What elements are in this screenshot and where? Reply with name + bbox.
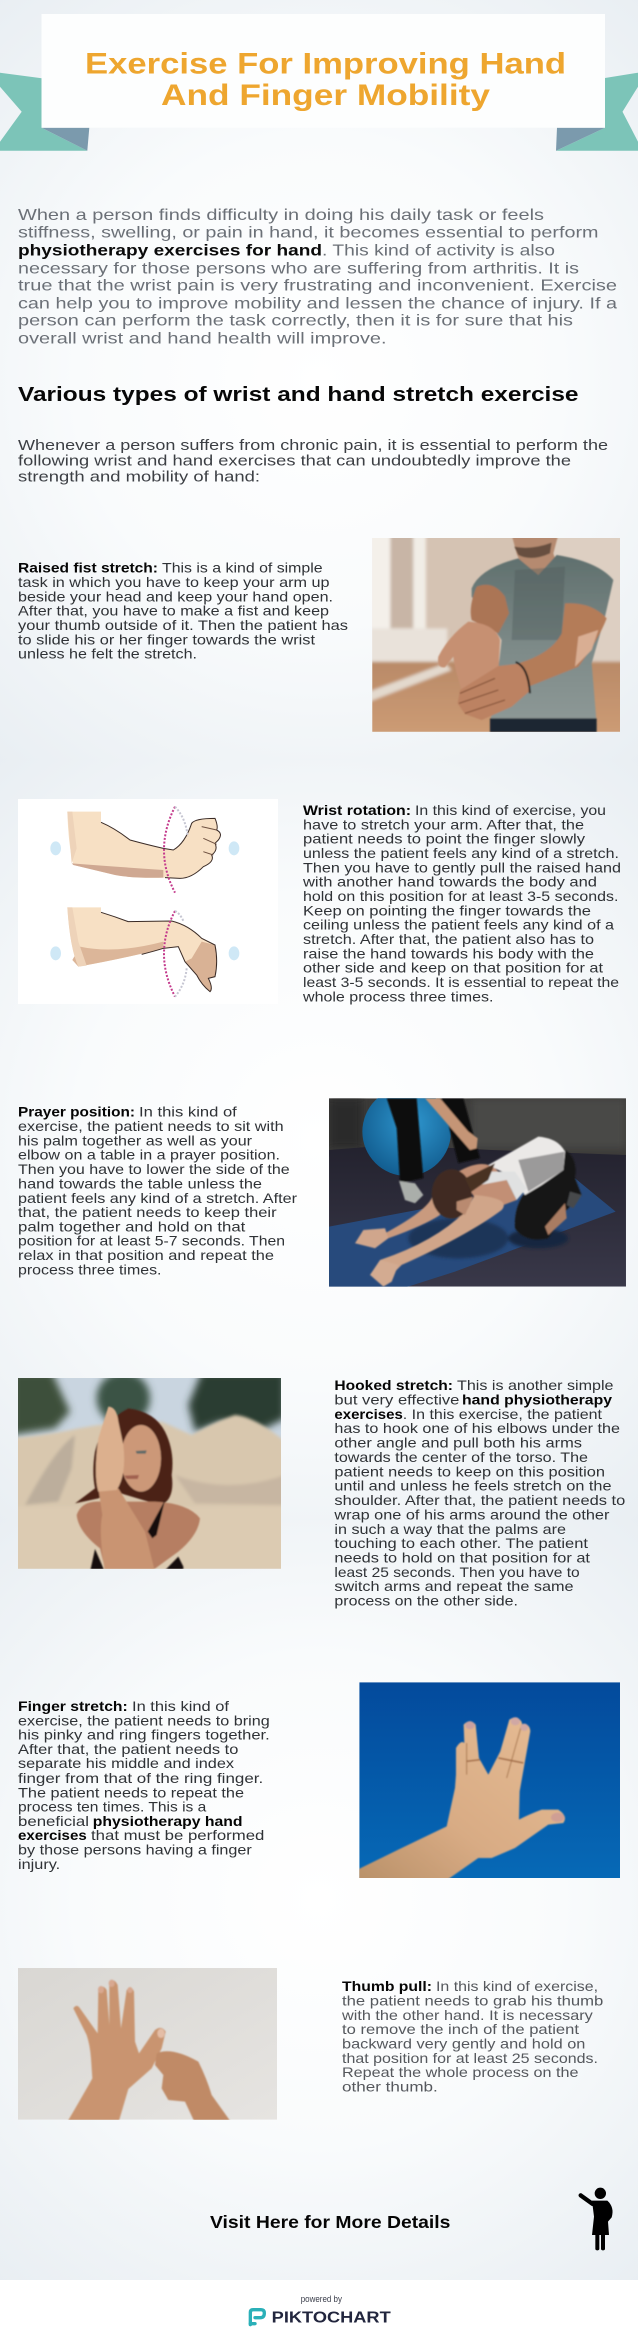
text: prayer position: Then you have to lower the side of the — [18, 1161, 290, 1177]
footer — [0, 2280, 638, 2344]
text: thumb pull: In this kind of exercise, — [436, 1978, 598, 1994]
lead-in paragraph: strength and mobility of hand: — [18, 470, 260, 486]
text: thumb pull: that position for at least 25 seconds. — [342, 2050, 598, 2066]
intro paragraph: physiotherapy exercises for hand — [18, 242, 322, 259]
text: wrist rotation: Wrist rotation: — [303, 802, 411, 818]
text: raised fist stretch — [18, 560, 348, 662]
text: hooked stretch: least 25 seconds. Then you have to — [334, 1564, 580, 1580]
intro paragraph: stiffness, swelling, or pain in hand, it becomes essential to perform — [18, 225, 598, 242]
text: wrist rotation — [302, 802, 621, 1005]
text: wrist rotation: unless the patient feels any kind of a stretch. — [303, 845, 619, 861]
text: prayer position: exercise, the patient needs to sit with — [18, 1118, 284, 1134]
text: hooked stretch: towards the center of the torso. The — [334, 1449, 588, 1465]
intro paragraph: necessary for those persons who are suffering from arthritis. It is — [18, 260, 579, 277]
ribbon right — [556, 73, 638, 151]
text: finger stretch: In this kind of — [132, 1698, 229, 1714]
text: finger stretch: separate his middle and index — [18, 1755, 234, 1771]
photo: man stretching wrist — [372, 538, 620, 732]
arm: hand lowered — [67, 907, 217, 992]
text: raised fist stretch: to slide his or her finger towards the wrist — [18, 631, 315, 647]
text: wrist rotation: least 3-5 seconds. It is essential to repeat the — [303, 974, 619, 990]
arm: fist raised — [67, 812, 220, 878]
intro paragraph: true that the wrist pain is very frustrating and inconvenient. Exercise — [18, 278, 617, 295]
text: raised fist stretch: Raised fist stretch: — [18, 560, 158, 576]
text: hooked stretch: but very effective — [334, 1391, 460, 1407]
intro paragraph: can help you to improve mobility and lessen the chance of injury. If a — [18, 295, 617, 312]
text: hooked stretch: wrap one of his arms around the other — [333, 1506, 610, 1522]
text: wrist rotation: have to stretch your arm. After that, the — [303, 816, 584, 832]
text: finger stretch: exercise, the patient needs to bring — [18, 1712, 270, 1728]
text: prayer position: process three times. — [18, 1261, 162, 1277]
text: finger stretch: that must be performed — [91, 1827, 264, 1843]
text: thumb pull: backward very gently and hold on — [342, 2035, 585, 2051]
footer: PIKTOCHART — [272, 2310, 391, 2327]
intro paragraph: . This kind of activity is also — [322, 242, 555, 259]
text: hooked stretch — [333, 1377, 626, 1608]
text: prayer position: hand towards the table unless the — [18, 1176, 262, 1192]
photo: hand with split fingers on blue sky — [359, 1682, 620, 1878]
text: wrist rotation: Keep on pointing the finger towards the — [303, 902, 591, 918]
title banner: And Finger Mobility — [161, 79, 490, 112]
text: prayer position: that, the patient needs to keep their — [18, 1204, 277, 1220]
text: wrist rotation: whole process three times. — [302, 989, 494, 1005]
text: hooked stretch: other angle and pull both his arms — [334, 1434, 582, 1450]
text: thumb pull: Repeat the whole process on the — [342, 2064, 579, 2080]
text: wrist rotation: ceiling unless the patient feels any kind of a — [303, 917, 614, 933]
footer: powered by — [301, 2294, 342, 2304]
section heading: Various types of wrist and hand stretch exercise — [18, 383, 578, 406]
intro paragraph — [18, 207, 617, 347]
guide dots — [50, 841, 239, 960]
text: finger stretch: finger from that of the ring finger. — [18, 1770, 263, 1786]
text: wrist rotation: with another hand towards the body and — [302, 874, 597, 890]
text: wrist rotation: hold on this position for at least 3-5 seconds. — [303, 888, 618, 904]
lead-in paragraph: following wrist and hand exercises that can undoubtedly improve the — [18, 454, 571, 470]
text: wrist rotation: patient needs to point the finger slowly — [303, 831, 585, 847]
title banner — [42, 14, 605, 128]
text: prayer position: patient feels any kind of a stretch. After — [18, 1190, 297, 1206]
text: thumb pull: other thumb. — [342, 2078, 438, 2094]
text: finger stretch: physiotherapy hand — [93, 1813, 242, 1829]
icon: person pointing — [578, 2188, 612, 2250]
intro paragraph: overall wrist and hand health will improve. — [18, 330, 386, 347]
text: raised fist stretch: unless he felt the stretch. — [18, 646, 197, 662]
text: wrist rotation: other side and keep on that position for at — [303, 960, 603, 976]
text: prayer position: relax in that position and repeat the — [18, 1247, 274, 1263]
text: finger stretch: Finger stretch: — [18, 1698, 128, 1714]
text: wrist rotation: In this kind of exercise, you — [415, 802, 606, 818]
intro paragraph: person can perform the task correctly, then it is for sure that his — [18, 313, 573, 330]
text: prayer position: his palm together as well as your — [18, 1132, 252, 1148]
text: hooked stretch: needs to hold on that position for at — [334, 1550, 590, 1566]
text: thumb pull: the patient needs to grab his thumb — [342, 1992, 604, 2008]
text: hooked stretch: in such a way that the palms are — [334, 1521, 566, 1537]
text: prayer position: elbow on a table in a prayer position. — [18, 1147, 280, 1163]
text: thumb pull — [341, 1978, 604, 2094]
text: raised fist stretch: beside your head and keep your hand open. — [18, 588, 333, 604]
text: prayer position: Prayer position: — [18, 1103, 135, 1119]
text: finger stretch: injury. — [18, 1856, 60, 1872]
text: thumb pull: Thumb pull: — [342, 1978, 432, 1994]
text: hooked stretch: This is another simple — [457, 1377, 614, 1393]
photo: pulling the thumb — [18, 1968, 277, 2120]
text: finger stretch: beneficial — [18, 1813, 89, 1829]
text: hooked stretch: . In this exercise, the patient — [403, 1406, 602, 1422]
text: finger stretch: his pinky and ring fingers together. — [18, 1727, 270, 1743]
call to action: Visit Here for More Details — [210, 2212, 450, 2232]
text: finger stretch: by those persons having a finger — [18, 1842, 252, 1858]
title banner: Exercise For Improving Hand — [85, 47, 566, 80]
text: thumb pull: with the other hand. It is necessary — [341, 2007, 593, 2023]
text: hooked stretch: patient needs to keep on this position — [334, 1463, 605, 1479]
text: hooked stretch: shoulder. After that, the patient needs to — [334, 1492, 626, 1508]
text: finger stretch: The patient needs to repeat the — [18, 1784, 244, 1800]
text: finger stretch — [18, 1698, 270, 1872]
text: hooked stretch: hand physiotherapy — [462, 1391, 612, 1407]
text: thumb pull: to remove the inch of the patient — [342, 2021, 579, 2037]
text: wrist rotation: Then you have to gently pull the raised hand — [303, 859, 621, 875]
rotation rings — [164, 807, 188, 997]
text: hooked stretch: until and unless he feels stretch on the — [334, 1478, 612, 1494]
intro paragraph: When a person finds difficulty in doing his daily task or feels — [18, 207, 544, 224]
icon: piktochart logo — [248, 2308, 266, 2326]
text: hooked stretch: process on the other side. — [334, 1592, 518, 1608]
photo: prayer stretch on mat — [329, 1098, 626, 1287]
text: finger stretch: After that, the patient needs to — [18, 1741, 239, 1757]
text: prayer position: In this kind of — [139, 1103, 237, 1119]
text: prayer position — [18, 1103, 297, 1277]
photo: woman in eagle arms pose — [18, 1378, 281, 1569]
text: raised fist stretch: This is a kind of simple — [162, 560, 323, 576]
text: finger stretch: exercises — [18, 1827, 87, 1843]
text: raised fist stretch: After that, you have to make a fist and keep — [18, 603, 329, 619]
ribbon left — [0, 73, 89, 151]
text: hooked stretch: Hooked stretch: — [334, 1377, 453, 1393]
text: raised fist stretch: your thumb outside of it. Then the patient has — [18, 617, 348, 633]
text: hooked stretch: switch arms and repeat the same — [334, 1578, 574, 1594]
text: prayer position: palm together and hold on that — [18, 1218, 245, 1234]
text: wrist rotation: raise the hand towards his body with the — [303, 945, 594, 961]
lead-in paragraph: Whenever a person suffers from chronic pain, it is essential to perform the — [18, 438, 608, 454]
text: hooked stretch: touching to each other. The patient — [334, 1535, 588, 1551]
text: finger stretch: process ten times. This is a — [18, 1799, 207, 1815]
text: wrist rotation: stretch. After that, the patient also has to — [303, 931, 594, 947]
lead-in paragraph — [18, 438, 608, 486]
text: hooked stretch: has to hook one of his elbows under the — [334, 1420, 620, 1436]
text: raised fist stretch: task in which you have to keep your arm up — [18, 574, 330, 590]
illustration: wrist rotation — [18, 799, 278, 1004]
text: hooked stretch: exercises — [334, 1406, 403, 1422]
text: prayer position: position for at least 5-7 seconds. Then — [18, 1233, 285, 1249]
